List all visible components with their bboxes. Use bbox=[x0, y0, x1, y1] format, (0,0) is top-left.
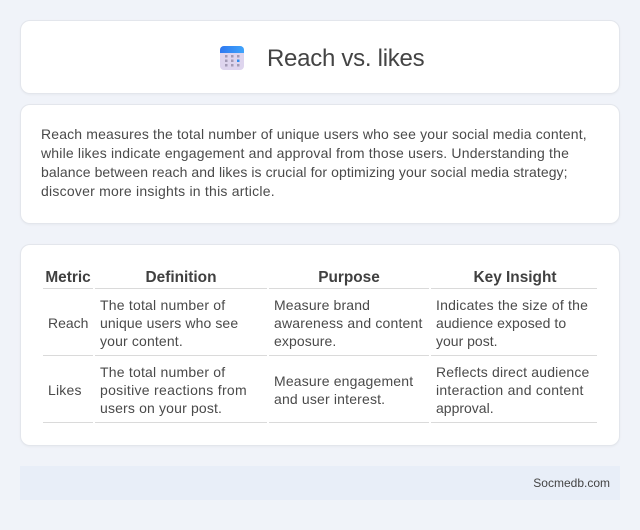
table: metrics comparison bbox=[43, 269, 597, 423]
table header row: Definition bbox=[146, 269, 216, 286]
text block: intro: Reach measures the total number of unique users who see your social media content, bbox=[41, 126, 587, 142]
table row: Reach: your content. bbox=[100, 333, 183, 349]
table row: Reach: Measure brand bbox=[274, 297, 370, 313]
table row: Reach: audience exposed to bbox=[436, 315, 566, 331]
table row: Likes: users on your post. bbox=[100, 400, 222, 416]
table row: Reach: awareness and content bbox=[274, 315, 423, 331]
table row: Likes: Reflects direct audience bbox=[436, 364, 590, 380]
text block: intro: balance between reach and likes is crucial for optimizing your social media strategy; bbox=[41, 164, 568, 180]
text block: intro: while likes indicate engagement and approval from those users. Understanding the bbox=[41, 145, 569, 161]
footer text: site name: Socmedb.com bbox=[533, 476, 610, 490]
table row: Reach bbox=[43, 297, 597, 356]
table header row: Purpose bbox=[318, 269, 380, 286]
panel: title card bbox=[20, 20, 620, 94]
table row: Likes: positive reactions from bbox=[100, 382, 247, 398]
panel: table card bbox=[20, 244, 620, 446]
table row: Likes bbox=[43, 364, 597, 423]
table header row: Key Insight bbox=[474, 269, 556, 286]
panel: footer bbox=[20, 466, 620, 500]
table row: Likes: and user interest. bbox=[274, 391, 385, 407]
table row: Likes: interaction and content bbox=[436, 382, 584, 398]
title: Reach vs. likes bbox=[267, 45, 424, 72]
table row: Reach: The total number of bbox=[100, 297, 225, 313]
table row: Reach: exposure. bbox=[274, 333, 336, 349]
table row: Likes: Likes bbox=[48, 382, 82, 398]
table header row: Metric bbox=[45, 269, 91, 286]
panel: intro text card bbox=[20, 104, 620, 224]
table row: Reach: Reach bbox=[48, 315, 88, 331]
table header row bbox=[43, 269, 597, 289]
text block: intro bbox=[41, 126, 587, 199]
table row: Reach: unique users who see bbox=[100, 315, 238, 331]
table row: Likes: The total number of bbox=[100, 364, 225, 380]
table row: Likes: approval. bbox=[436, 400, 494, 416]
table row: Reach: Indicates the size of the bbox=[436, 297, 588, 313]
table row: Likes: Measure engagement bbox=[274, 373, 413, 389]
text block: intro: discover more insights in this article. bbox=[41, 183, 275, 199]
table row: Reach: your post. bbox=[436, 333, 497, 349]
icon: calendar bbox=[220, 46, 244, 70]
